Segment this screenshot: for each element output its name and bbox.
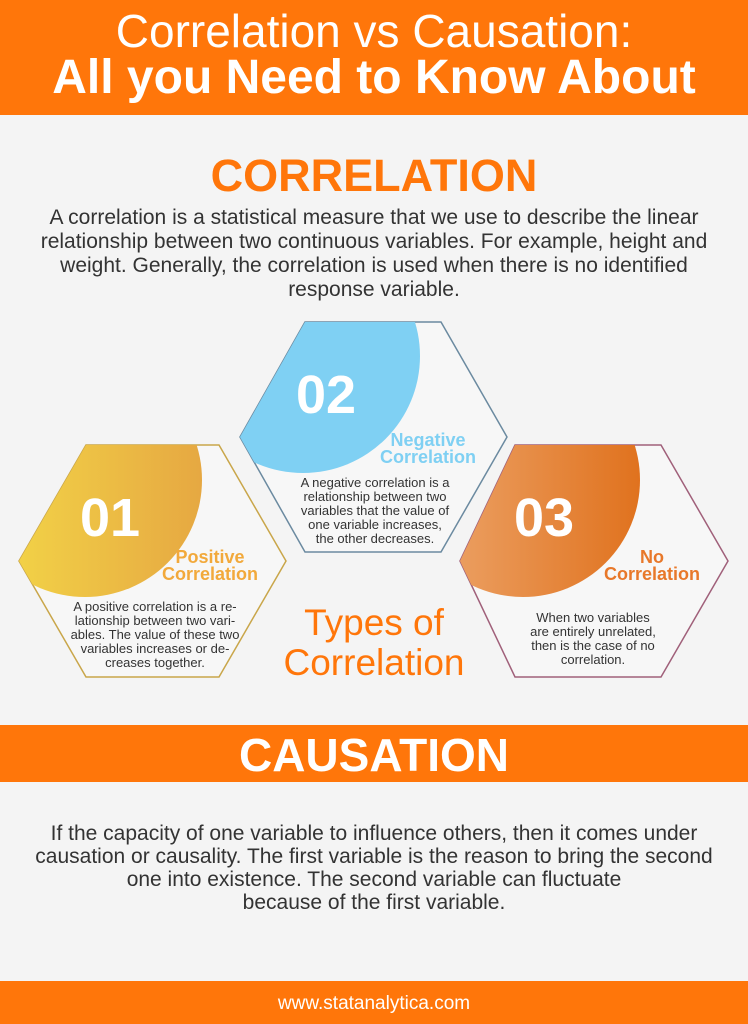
hexagon 03: no correlation: correlation.: [561, 652, 625, 667]
hexagon 02: negative correlation: the other decreases.: [316, 531, 434, 546]
hexagon 03: no correlation: [459, 444, 729, 678]
hexagon 02: negative correlation: variables that the value of: [301, 503, 449, 518]
causation paragraph: because of the first variable.: [243, 891, 505, 914]
hexagon 02: negative correlation: [239, 321, 508, 553]
hexagon 02: negative correlation: 02: [296, 365, 356, 425]
hexagon 01: positive correlation: creases together.: [105, 655, 205, 670]
hexagon 02: negative correlation: A negative correlation is a: [301, 475, 450, 490]
correlation paragraph: response variable.: [288, 278, 460, 301]
hexagon 01: positive correlation: lationship between two vari-: [75, 613, 235, 628]
causation band: CAUSATION: [239, 729, 509, 781]
correlation paragraph: relationship between two continuous variables. For example, height and: [41, 230, 707, 253]
hexagon 01: positive correlation: Correlation: [162, 564, 258, 584]
footer: [0, 981, 748, 1024]
hexagon 02: negative correlation: Correlation: [380, 447, 476, 467]
causation paragraph: If the capacity of one variable to influence others, then it comes under: [51, 822, 697, 845]
hexagon 01: positive correlation: A positive correlation is a re-: [73, 599, 237, 614]
causation paragraph: one into existence. The second variable can fluctuate: [127, 868, 621, 891]
hexagon 03: no correlation: When two variables: [536, 610, 650, 625]
hexagon 02: negative correlation: Negative: [390, 430, 466, 450]
hexagon 02: negative correlation: relationship between two: [303, 489, 447, 504]
correlation paragraph: A correlation is a statistical measure that we use to describe the linear: [50, 206, 698, 229]
title line 2: All you Need to Know About: [52, 51, 696, 104]
header band: [0, 0, 748, 115]
hexagon 02: negative correlation: one variable increases,: [308, 517, 442, 532]
correlation paragraph: weight. Generally, the correlation is used when there is no identified: [59, 254, 688, 277]
footer: www.statanalytica.com: [277, 993, 470, 1014]
correlation paragraph: [41, 206, 707, 301]
hexagon 01: positive correlation: ables. The value of these two: [71, 627, 239, 642]
types of correlation label: Correlation: [284, 642, 464, 683]
hexagon 01: positive correlation: Positive: [175, 547, 245, 567]
hexagon 01: positive correlation: [18, 444, 287, 678]
hexagon 03: no correlation: No: [640, 547, 664, 567]
hexagon 01: positive correlation: variables increases or de-: [81, 641, 229, 656]
types of correlation label: Types of: [304, 602, 445, 643]
causation paragraph: [35, 822, 713, 914]
heading: correlation: CORRELATION: [211, 150, 537, 201]
hexagon 03: no correlation: 03: [514, 488, 574, 548]
hexagon 03: no correlation: Correlation: [604, 564, 700, 584]
types of correlation label: [284, 602, 464, 683]
hexagon 01: positive correlation: 01: [80, 488, 140, 548]
hexagon 03: no correlation: then is the case of no: [531, 638, 655, 653]
title line 1: Correlation vs Causation:: [116, 5, 632, 57]
hexagon 03: no correlation: are entirely unrelated,: [530, 624, 656, 639]
causation paragraph: causation or causality. The first variable is the reason to bring the second: [35, 845, 713, 868]
causation band: [0, 725, 748, 782]
